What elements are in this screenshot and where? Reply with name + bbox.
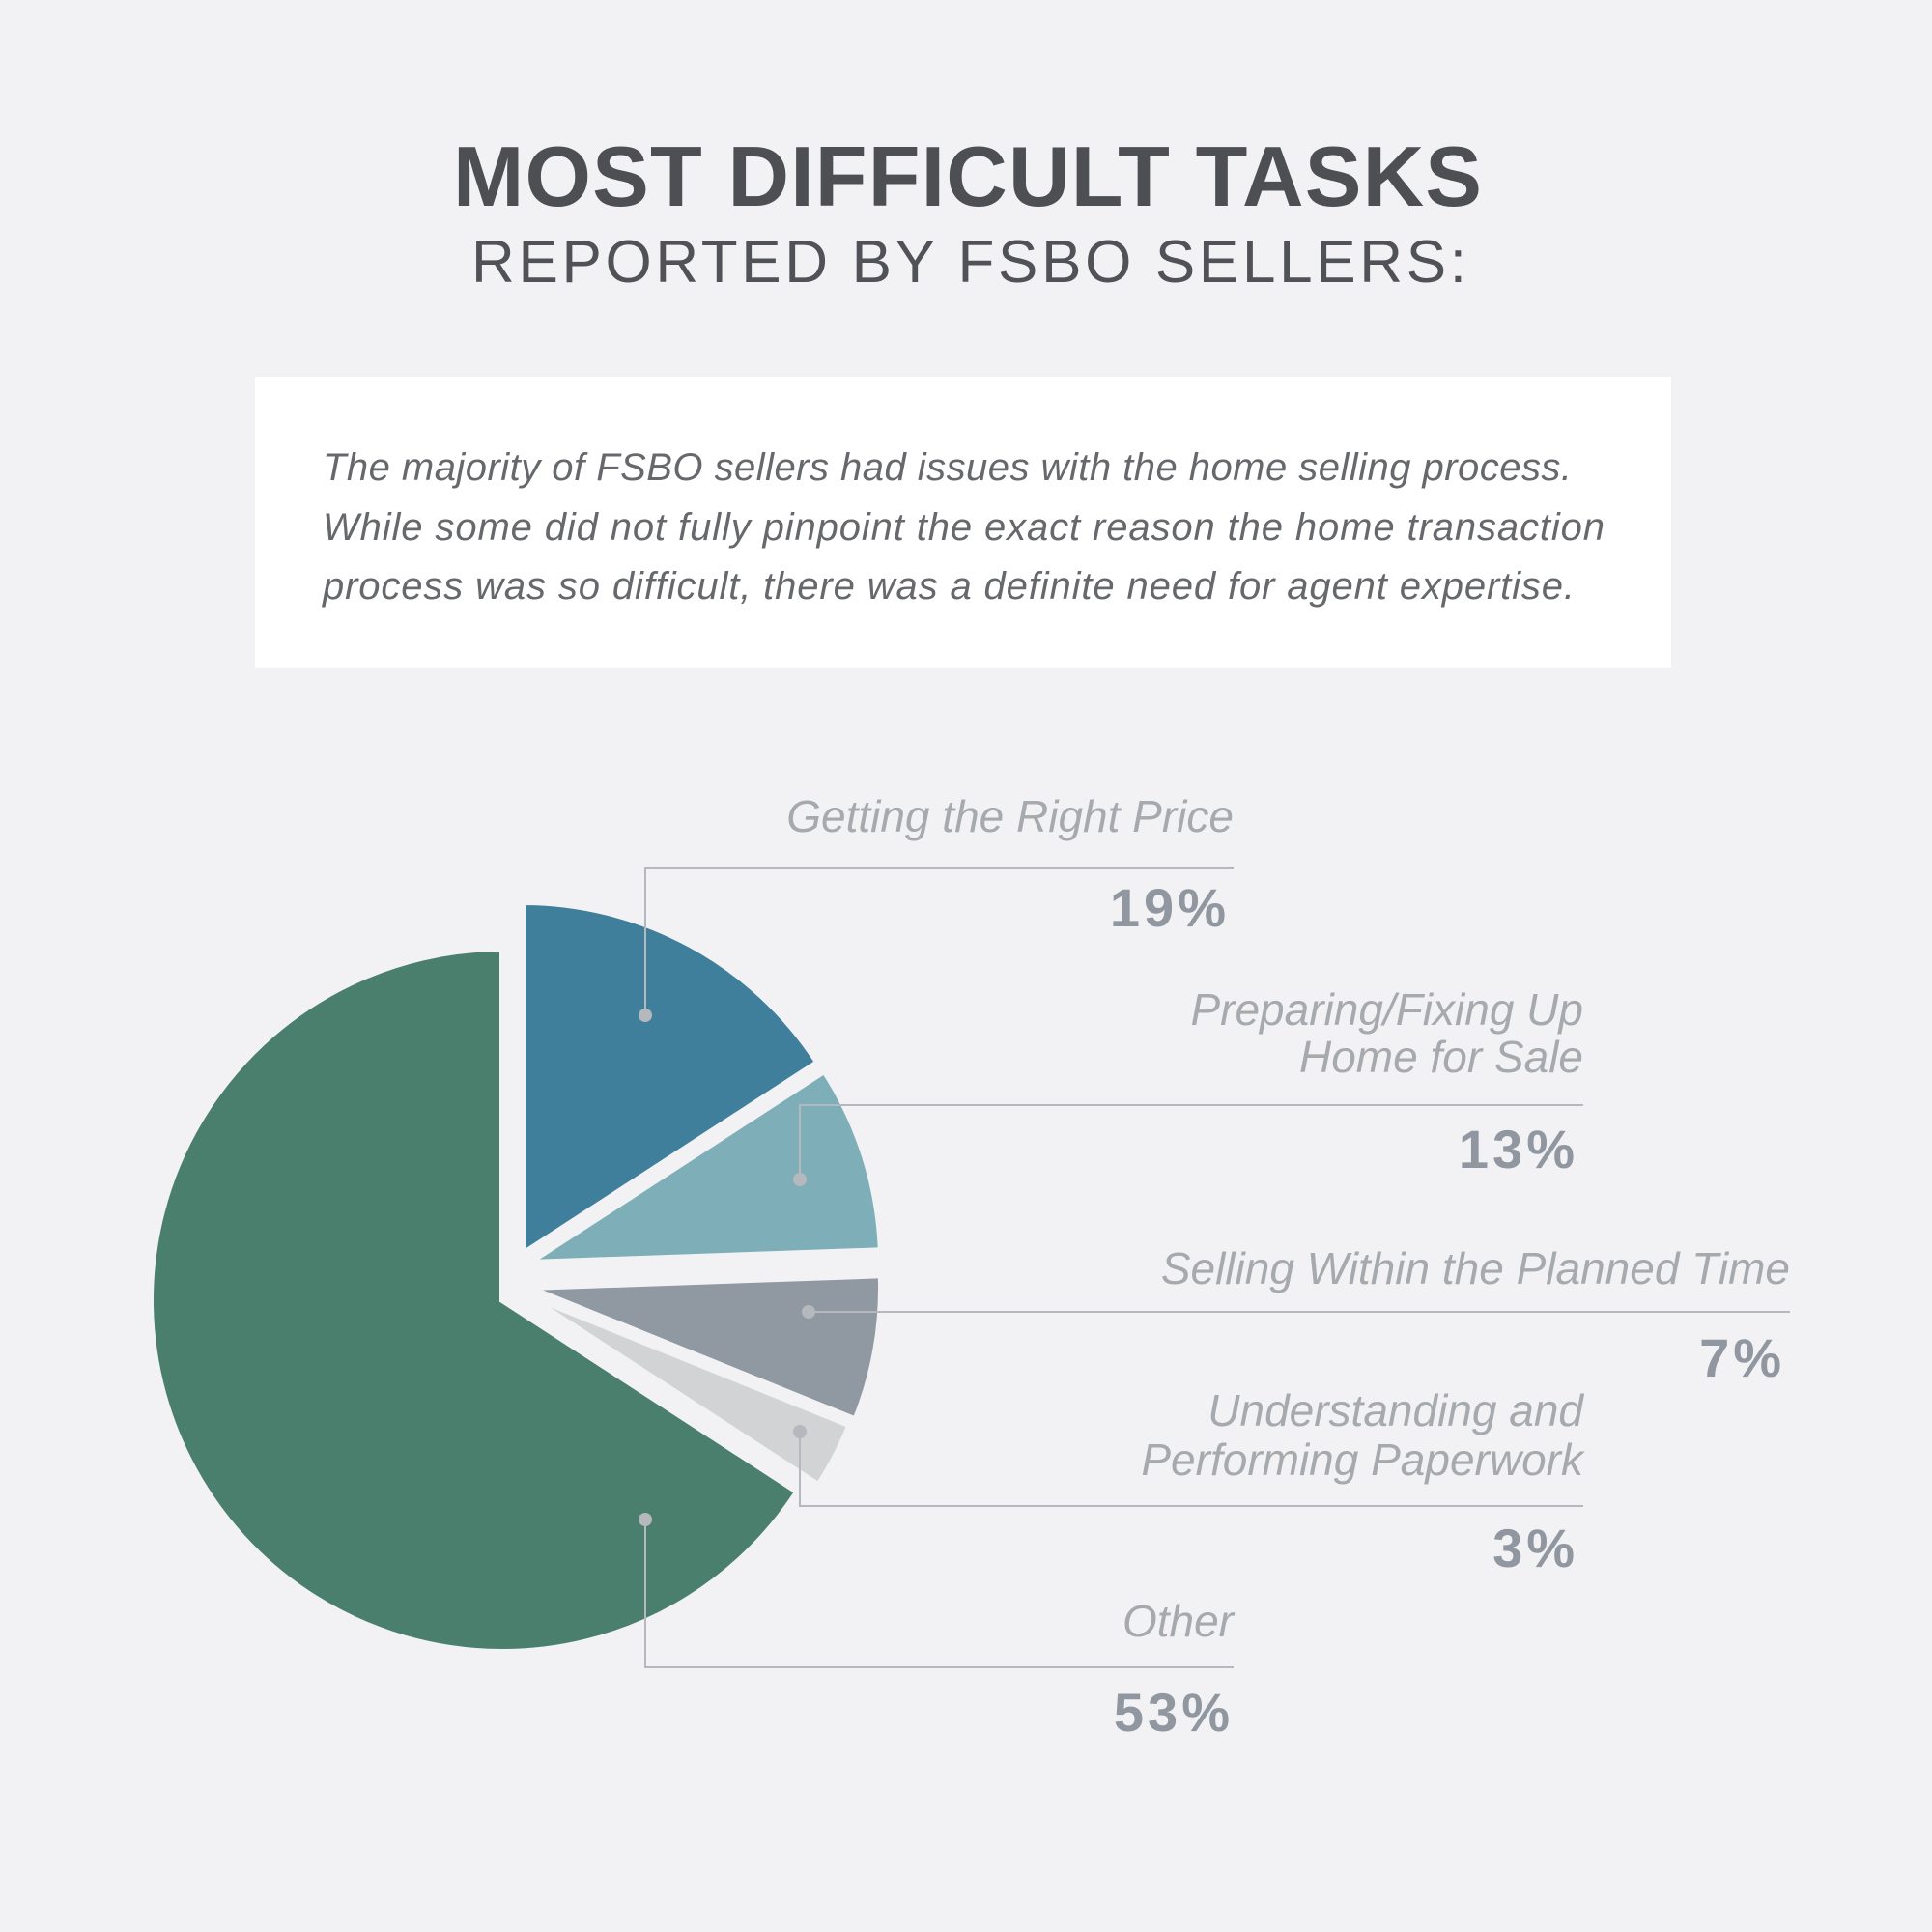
label: paperwork: Performing Paperwork xyxy=(1141,1435,1585,1485)
label: paperwork: 3% xyxy=(1492,1518,1578,1578)
intro text box: While some did not fully pinpoint the exact reason the home transaction xyxy=(323,506,1605,549)
label: other: 53% xyxy=(1114,1682,1234,1743)
slice: other xyxy=(151,949,797,1652)
slice: getting the right price xyxy=(523,902,817,1254)
label: preparing/fixing up: 13% xyxy=(1459,1119,1578,1179)
label: preparing/fixing up xyxy=(1190,984,1583,1179)
label: getting the right price: Getting the Right Price xyxy=(786,791,1234,841)
label: selling within planned time: 7% xyxy=(1699,1327,1785,1388)
label: other: Other xyxy=(1122,1596,1236,1646)
intro text box xyxy=(255,377,1671,668)
label: preparing/fixing up: Preparing/Fixing Up xyxy=(1190,984,1583,1035)
label: selling within planned time xyxy=(1161,1243,1790,1388)
label: paperwork xyxy=(1141,1385,1585,1578)
slice: preparing/fixing up xyxy=(529,1071,881,1263)
subtitle: REPORTED BY FSBO SELLERS: xyxy=(471,229,1466,296)
label: getting the right price: 19% xyxy=(1110,877,1230,938)
label: getting the right price xyxy=(786,791,1234,938)
intro text box: process was so difficult, there was a definite need for agent expertise. xyxy=(322,565,1575,608)
label: paperwork: Understanding and xyxy=(1208,1385,1584,1435)
slice: selling within planned time xyxy=(529,1275,881,1419)
intro text box: The majority of FSBO sellers had issues with the home selling process. xyxy=(323,446,1572,489)
pie chart xyxy=(151,902,881,1652)
leader lines xyxy=(645,868,1790,1667)
leader dots xyxy=(639,1009,815,1526)
slice: paperwork xyxy=(524,1293,850,1485)
label: selling within planned time: Selling Within the Planned Time xyxy=(1161,1243,1790,1293)
label: preparing/fixing up: Home for Sale xyxy=(1299,1032,1583,1082)
label: other xyxy=(1114,1596,1236,1743)
title: MOST DIFFICULT TASKS xyxy=(453,128,1482,224)
